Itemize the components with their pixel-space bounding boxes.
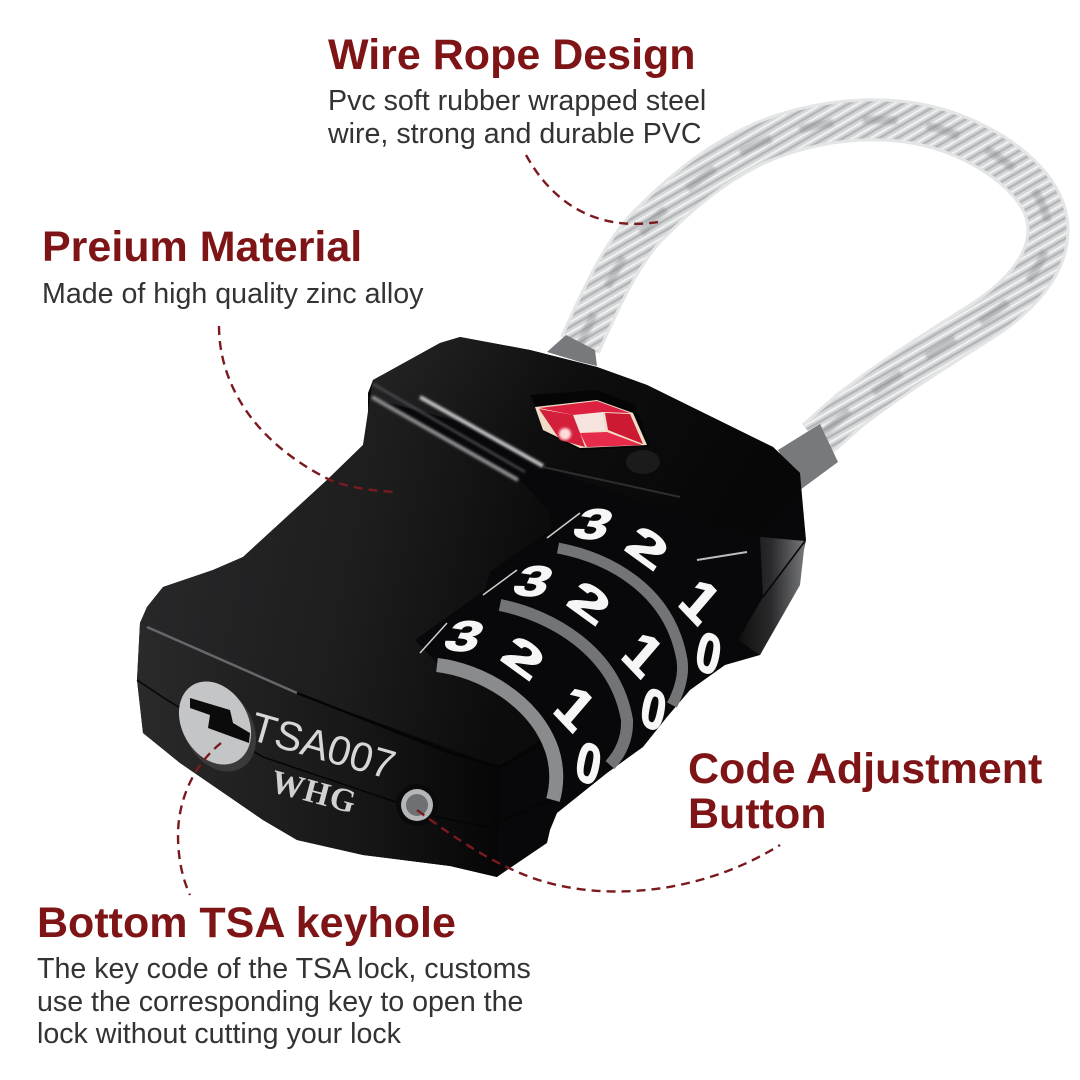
text: keyhole description: use the corresponding key to open the: [37, 986, 523, 1018]
digits: 2: [494, 625, 553, 691]
heading: wire rope design: Wire Rope Design: [328, 31, 696, 79]
heading: premium material: Preium Material: [42, 223, 362, 271]
digits: 3: [506, 557, 561, 606]
left collar: [547, 335, 597, 366]
rings: [558, 548, 683, 705]
digits: 2: [560, 570, 619, 636]
digits: 0: [571, 728, 607, 799]
digits: 3: [437, 612, 492, 661]
recess highlights: [547, 513, 580, 538]
text: wire rope description: [328, 85, 706, 150]
code adjustment button: [396, 784, 438, 826]
ridge highlights: [372, 397, 518, 480]
digits: 0: [691, 618, 727, 689]
lock brand text: WHG: [267, 764, 361, 821]
dials: [420, 500, 731, 800]
cable: [547, 120, 1048, 490]
text: material description: Made of high quality zinc alloy: [42, 278, 423, 310]
digits: [437, 500, 731, 799]
heading: code adjustment button: Code Adjustment: [688, 745, 1042, 793]
front face: [137, 623, 500, 877]
text: keyhole description: The key code of the TSA lock, customs: [37, 953, 531, 985]
digits: 2: [618, 515, 677, 581]
TSA keyhole: [164, 668, 271, 785]
text: wire rope description: Pvc soft rubber wrapped steel: [328, 85, 706, 117]
plateau: [140, 398, 552, 767]
TSA red indicator: [530, 390, 660, 474]
heading: bottom TSA keyhole: Bottom TSA keyhole: [37, 899, 456, 947]
digits: 1: [611, 620, 674, 690]
right collar: [778, 424, 838, 490]
text: wire rope description: wire, strong and durable PVC: [328, 118, 702, 150]
digits: 1: [543, 674, 606, 744]
heading: code adjustment button: [688, 745, 1042, 838]
right face: [738, 537, 805, 655]
lock body: [137, 337, 806, 877]
digits: 1: [668, 567, 731, 637]
digits: 0: [636, 674, 672, 745]
leader lines: [178, 155, 780, 895]
upper surface: [370, 337, 800, 537]
heading: code adjustment button: Button: [688, 790, 826, 838]
silhouette: [137, 337, 806, 877]
text: keyhole description: lock without cutting your lock: [37, 1018, 401, 1050]
screw: [626, 450, 660, 474]
text: keyhole description: [37, 953, 531, 1050]
digits: 3: [566, 500, 621, 549]
lock model text: TSA007: [246, 703, 401, 788]
